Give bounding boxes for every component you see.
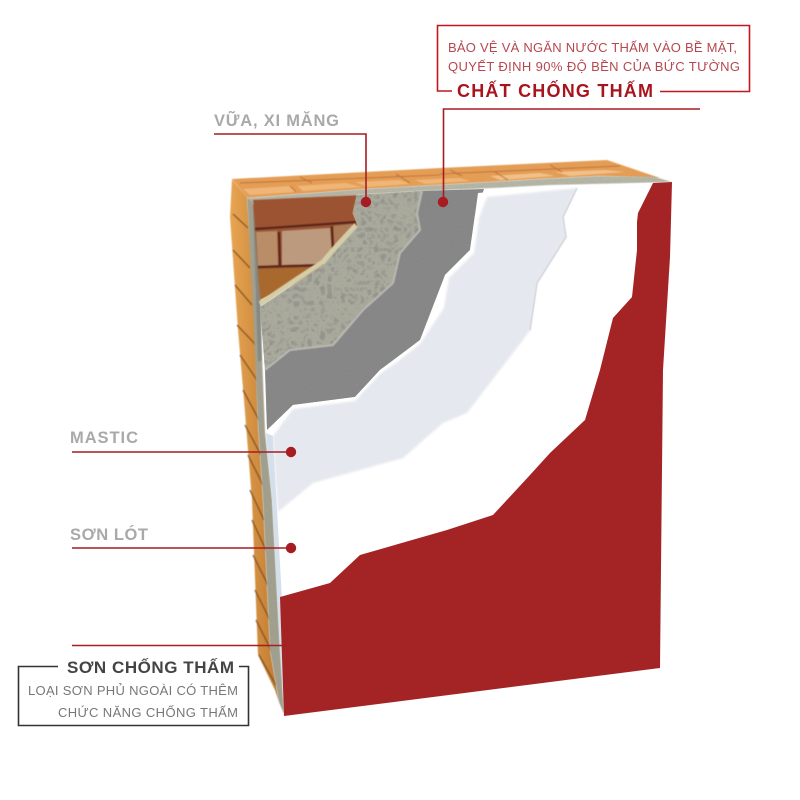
concrete edge strip	[247, 176, 672, 714]
brick top face	[232, 160, 660, 198]
brick side face	[230, 179, 279, 702]
primer layer (sơn lót)	[267, 182, 672, 716]
callout description: LOẠI SƠN PHỦ NGOÀI CÓ THÊM	[28, 683, 238, 698]
leader: mastic	[72, 447, 296, 457]
label: mastic: MASTIC	[70, 429, 138, 447]
cement layer (xi măng)	[265, 189, 484, 430]
leader: vữa, xi măng	[214, 134, 371, 207]
callout: sơn chống thấm	[18, 657, 248, 726]
callout: chất chống thấm	[438, 26, 750, 101]
leader: sơn chống thấm	[72, 644, 286, 646]
label: sơn lót: SƠN LÓT	[70, 525, 148, 544]
label: vữa, xi măng: VỮA, XI MĂNG	[214, 110, 339, 130]
callout description: BẢO VỆ VÀ NGĂN NƯỚC THẤM VÀO BỀ MẶT,	[448, 40, 737, 55]
mastic layer	[273, 188, 577, 512]
exposed brick layer	[253, 195, 358, 300]
mortar layer (vữa)	[260, 191, 422, 370]
callout description: CHỨC NĂNG CHỐNG THẤM	[58, 705, 238, 720]
waterproof paint layer	[280, 182, 672, 716]
leader: sơn lót	[72, 543, 296, 553]
callout heading: CHẤT CHỐNG THẤM	[457, 80, 653, 101]
wall illustration	[230, 160, 672, 716]
callout frame	[18, 666, 248, 726]
callout heading: SƠN CHỐNG THẤM	[67, 657, 234, 677]
leader: chất chống thấm	[438, 109, 700, 207]
callout frame	[438, 26, 750, 92]
callout description: QUYẾT ĐỊNH 90% ĐỘ BỀN CỦA BỨC TƯỜNG	[448, 59, 740, 74]
left light edge	[266, 433, 285, 714]
